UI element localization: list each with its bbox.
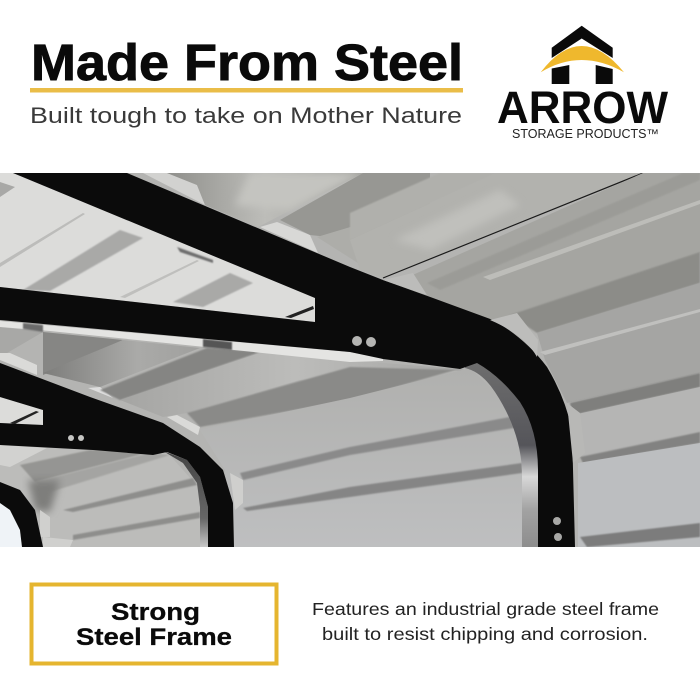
upper ceiling panels above main beam [143, 173, 700, 547]
callout border [32, 584, 276, 664]
callout box [32, 584, 276, 664]
title underline [30, 88, 463, 92]
middle shaded ceiling band [0, 327, 525, 547]
steel beam: main right frame [0, 173, 575, 547]
chrome bracket right [465, 362, 538, 547]
bolts on joint [68, 336, 562, 541]
callout heading line 2: Steel Frame [76, 624, 232, 651]
logo tagline: STORAGE PRODUCTS™ [512, 127, 659, 141]
gussets [230, 273, 585, 510]
steel beam: far left frame [0, 482, 43, 547]
logo wordmark: ARROW [497, 82, 669, 133]
description text: built to resist chipping and corrosion. [322, 624, 648, 644]
left bright ceiling panels between beams [0, 173, 315, 322]
steel beam: lower left frame [0, 363, 234, 547]
icon: gold arc [541, 46, 624, 72]
flange dark reflections [23, 323, 232, 350]
description text: Features an industrial grade steel frame [312, 599, 659, 619]
chrome bracket left [163, 451, 208, 547]
icon: house roof [552, 26, 613, 58]
lower left ceiling [0, 397, 210, 547]
logo: Arrow Storage Products [497, 26, 669, 141]
photo: steel frame carport interior [0, 173, 700, 547]
callout heading line 1: Strong [111, 599, 200, 626]
icon: house left pillar [552, 65, 569, 84]
chrome flange under second beam [0, 321, 383, 362]
subtitle: Built tough to take on Mother Nature [30, 103, 462, 128]
base [0, 173, 700, 547]
description text [312, 599, 659, 644]
title: Made From Steel [31, 34, 463, 91]
icon: house right pillar [596, 65, 613, 84]
